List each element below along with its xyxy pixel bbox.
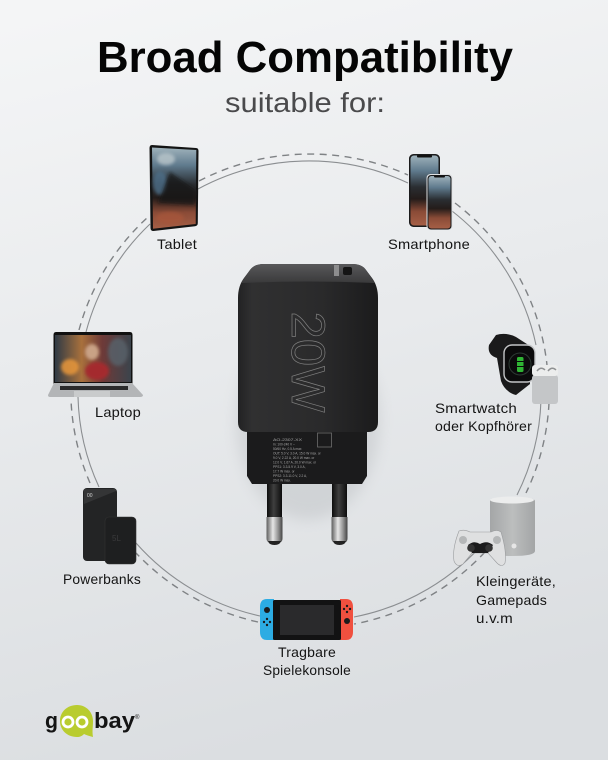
logo: goobay (45, 705, 140, 737)
label: smartwatch or headphones: oder Kopfhörer (435, 418, 532, 434)
rating label: 50/60 Hz, 0.5 A max (273, 447, 302, 451)
rating label: 12.0 V, 1.67 A, 20.0 W max. or (273, 460, 317, 464)
compatibility ring (71, 154, 549, 624)
icon: powerbanks: 5L (112, 534, 121, 543)
charger pins (266, 483, 348, 545)
label: powerbanks: Powerbanks (63, 571, 141, 587)
charger top bevel (241, 264, 375, 283)
usb-c port (334, 265, 352, 276)
charger body (238, 264, 378, 432)
icon: powerbanks (83, 488, 136, 564)
rating label: 17.7 W max. or (273, 470, 296, 474)
label: smartwatch or headphones (435, 400, 532, 434)
label: small devices: Gamepads (476, 592, 547, 608)
label: tablet: Tablet (157, 236, 197, 252)
rating label (273, 437, 322, 482)
label: handheld console (263, 644, 351, 678)
rating label: In: 100-240 V ~ (273, 442, 295, 446)
label: handheld console: Tragbare (278, 644, 336, 660)
title: Broad Compatibility (97, 33, 514, 82)
logo: goobay: bay (94, 708, 136, 733)
label: smartwatch or headphones: Smartwatch (435, 400, 517, 416)
charger (236, 264, 380, 545)
icon: powerbanks: 00 (87, 493, 93, 499)
label: small devices (476, 573, 556, 626)
icon: handheld console (260, 599, 353, 640)
rating label: PPS2: 3.3-11.0 V, 2.2 A, (273, 474, 307, 478)
icon: tablet (150, 145, 198, 231)
label: handheld console: Spielekonsole (263, 662, 351, 678)
icon: speaker and gamepad (454, 496, 535, 566)
rating label: PPS1: 3.3-5.9 V, 3.0 A, (273, 465, 306, 469)
logo: goobay: ® (135, 714, 140, 721)
label: smartphone: Smartphone (388, 236, 470, 252)
rating label: AO-2307-XX (273, 437, 302, 442)
label: laptop: Laptop (95, 404, 141, 420)
charger plug block (247, 428, 367, 484)
label: small devices: Kleingeräte, (476, 573, 556, 589)
logo: goobay: g (45, 708, 58, 733)
rating label: 9.0 V, 2.22 A, 20.0 W max. or (273, 456, 315, 460)
wattage marking: 20W (282, 312, 335, 413)
icon: smartwatch and earbuds (489, 334, 558, 404)
rating label: 20.0 W max. (273, 478, 291, 482)
rating label: OUT: 5.0 V, 3.0 A, 15.0 W max. or (273, 452, 322, 456)
subtitle: suitable for: (225, 87, 385, 118)
label: small devices: u.v.m (476, 610, 513, 626)
icon: laptop (48, 332, 143, 397)
icon: smartphones (409, 154, 452, 230)
